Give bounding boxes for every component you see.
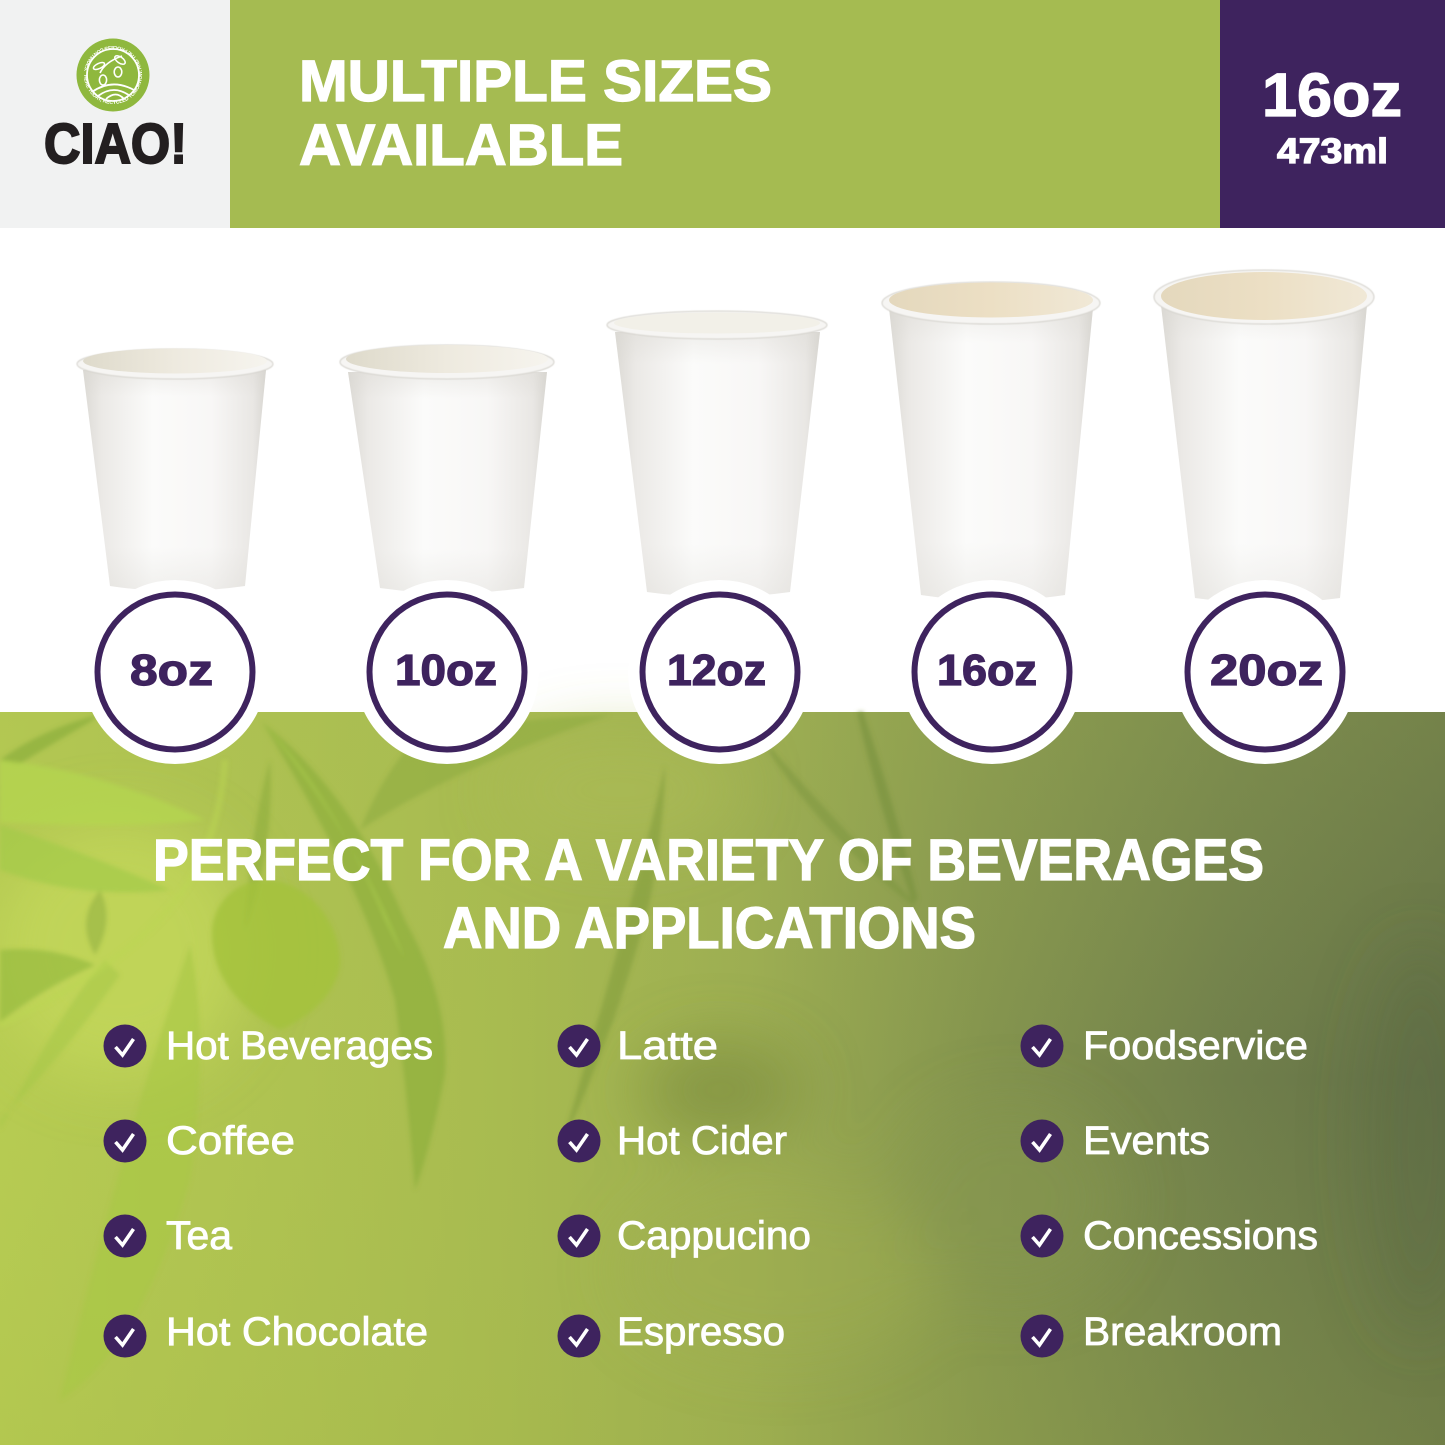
cup: 20oz (1154, 270, 1374, 603)
size badge: 8oz (83, 580, 267, 764)
item: Espresso (558, 1310, 785, 1358)
size badge: 12oz: 12oz (667, 646, 766, 695)
item: Hot Cider: Hot Cider (617, 1119, 787, 1163)
size badge: 20oz: 20oz (1210, 646, 1323, 695)
title: MULTIPLE SIZES (299, 49, 772, 114)
header: green title banner (230, 0, 1220, 228)
item: Concessions: Concessions (1083, 1214, 1318, 1258)
list column 3 (1020, 1024, 1318, 1358)
cup: 10oz (340, 345, 554, 593)
olive (212, 880, 340, 1030)
heading: beverages and applications: PERFECT FOR A VARIETY OF BEVERAGES (153, 828, 1264, 893)
blurred tone patches (0, 730, 1445, 1360)
item: Cappucino: Cappucino (617, 1214, 811, 1258)
size badge: 20oz (1173, 580, 1357, 764)
item: Events (1020, 1119, 1210, 1163)
header: size callout: 473ml (1277, 132, 1388, 171)
heading: beverages and applications (153, 828, 1264, 961)
item: Espresso: Espresso (617, 1310, 785, 1354)
logo wordmark: CIAO! (44, 112, 187, 176)
item: Tea: Tea (166, 1214, 233, 1258)
size badge: 10oz (355, 580, 539, 764)
cup: 8oz (77, 348, 273, 591)
size badge: 12oz (628, 580, 812, 764)
size badge: 16oz (900, 580, 1084, 764)
header: size callout: 16oz (1262, 61, 1402, 129)
item: Hot Chocolate: Hot Chocolate (166, 1310, 428, 1354)
cup: 12oz (607, 311, 827, 597)
item: Hot Beverages: Hot Beverages (166, 1024, 433, 1068)
item: Coffee (104, 1119, 295, 1163)
item: Coffee: Coffee (166, 1119, 295, 1163)
size badge: 8oz: 8oz (130, 646, 213, 695)
item: Latte (558, 1024, 718, 1068)
size badge: 10oz: 10oz (395, 646, 497, 695)
heading: beverages and applications: AND APPLICATIONS (443, 896, 976, 961)
item: Foodservice: Foodservice (1083, 1024, 1308, 1068)
title (299, 49, 772, 178)
header: logo panel (0, 0, 230, 228)
size badge: 16oz: 16oz (937, 646, 1037, 695)
cup: 16oz (882, 282, 1100, 600)
olive branch leaves (0, 712, 915, 1400)
header: size callout (1220, 0, 1445, 228)
list column 2 (558, 1024, 811, 1358)
icon: olive branch seal: HERE TODAY, RECYCLED TOMORROW. AND THE PROCESS CONTINUES. (84, 46, 142, 104)
list column 1 (104, 1024, 433, 1358)
title: AVAILABLE (299, 113, 623, 178)
item: Latte: Latte (617, 1024, 718, 1068)
item: Tea (104, 1214, 233, 1258)
item: Breakroom: Breakroom (1083, 1310, 1282, 1354)
item: Breakroom (1020, 1310, 1282, 1358)
panel: green leaf background (0, 712, 1445, 1445)
item: Events: Events (1083, 1119, 1210, 1163)
